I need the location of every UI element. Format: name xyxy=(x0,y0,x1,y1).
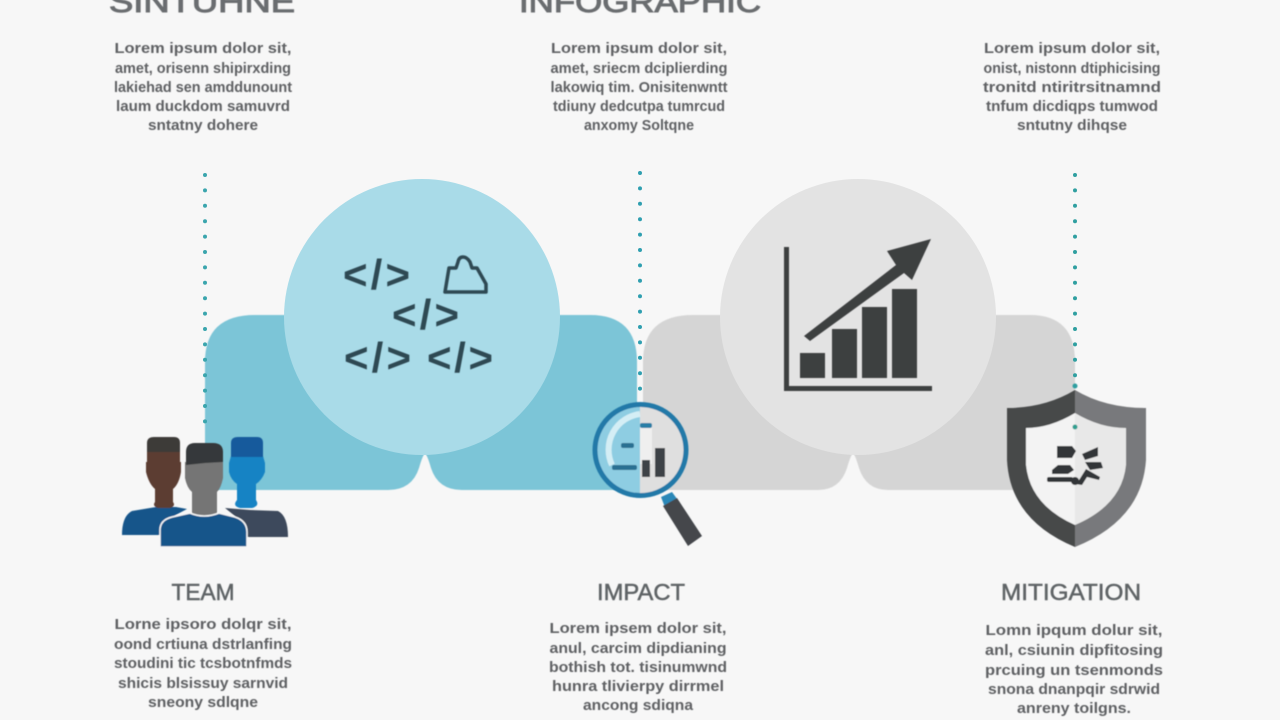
dots over shield xyxy=(1072,384,1078,388)
text block: top right: Lorem ipsum dolor sit, xyxy=(984,40,1160,57)
text block: top center xyxy=(550,40,728,134)
icon: code symbols: </> xyxy=(427,334,493,381)
text block: bottom right: prcuing un tsenmonds xyxy=(985,662,1163,679)
text block: bottom center: Lorem ipsem dolor sit, xyxy=(550,620,726,637)
text block: bottom center: hunra tlivierpy dirrmel xyxy=(552,678,724,695)
shield emblem xyxy=(1047,446,1103,485)
text block: top left: lakiehad sen amddunount xyxy=(114,79,292,96)
icon: bag xyxy=(445,257,486,292)
heading: impact: IMPACT xyxy=(597,579,685,605)
person center xyxy=(160,443,247,547)
dotted line: left xyxy=(203,175,207,436)
text block: top left xyxy=(114,40,292,134)
text block: top right: sntutny dihqse xyxy=(1017,117,1127,134)
heading: mitigation: MITIGATION xyxy=(1001,579,1141,605)
text block: bottom left: shicis blsissuy sarnvid xyxy=(118,675,288,692)
text block: bottom left: sneony sdlqne xyxy=(148,694,258,711)
text block: top right: onist, nistonn dtiphicising xyxy=(984,60,1160,77)
text block: bottom right: anl, csiunin dipfitosing xyxy=(985,642,1163,659)
text block: top center: anxomy Soltqne xyxy=(584,117,694,134)
icon: code symbols: </> xyxy=(343,251,410,298)
text block: top center: tdiuny dedcutpa tumrcud xyxy=(553,98,725,115)
text block: top center: Lorem ipsum dolor sit, xyxy=(551,40,727,57)
text block: top right: tronitd ntiritrsitnamnd xyxy=(983,79,1161,96)
gray cloud panel xyxy=(643,315,1075,490)
teal circle xyxy=(284,179,560,455)
text block: top left: amet, orisenn shipirxding xyxy=(115,60,291,77)
icon: magnifier xyxy=(593,403,702,546)
person right xyxy=(225,437,288,537)
handle xyxy=(661,492,680,510)
gray circle xyxy=(720,179,996,455)
text block: top left: Lorem ipsum dolor sit, xyxy=(114,40,292,57)
text block: top right: tnfum dicdiqps tumwod xyxy=(986,98,1158,115)
text block: top center: lakowiq tim. Onisitenwntt xyxy=(550,79,728,96)
text block: bottom right xyxy=(985,622,1163,717)
text block: bottom center xyxy=(549,620,727,714)
dotted line: center xyxy=(638,173,642,400)
icon: shield xyxy=(1007,384,1146,547)
text block: bottom left: Lorne ipsoro dolqr sit, xyxy=(114,616,292,633)
heading: team: TEAM xyxy=(172,579,234,605)
text block: bottom left: oond crtiuna dstrlanfing xyxy=(114,636,292,653)
dotted line: right xyxy=(1073,175,1077,390)
icon: growth chart xyxy=(784,239,932,391)
text block: top left: sntatny dohere xyxy=(148,117,258,134)
text block: bottom right: snona dnanpqir sdrwid xyxy=(988,681,1160,698)
text block: top center: amet, sriecm dciplierding xyxy=(550,60,728,77)
text block: top left: laum duckdom samuvrd xyxy=(116,98,290,115)
lens xyxy=(593,403,640,497)
icon: code symbols: </> xyxy=(344,334,411,381)
icon: code symbols: </> xyxy=(392,291,459,338)
person left xyxy=(122,437,187,535)
text block: bottom right: Lomn ipqum dolur sit, xyxy=(986,622,1162,639)
teal cloud panel xyxy=(205,315,637,490)
icon: code symbols xyxy=(343,251,493,381)
text block: bottom left xyxy=(114,616,292,711)
icon: team of people xyxy=(122,437,288,547)
text block: bottom center: bothish tot. tisinumwnd xyxy=(549,659,727,676)
text block: top right xyxy=(983,40,1161,134)
bars in lens xyxy=(640,423,652,428)
text block: bottom center: anul, carcim dipdianing xyxy=(550,640,726,657)
text block: bottom left: stoudini tic tcsbotnfmds xyxy=(114,655,292,672)
text block: bottom right: anreny toilgns. xyxy=(1017,700,1131,717)
text block: bottom center: ancong sdiqna xyxy=(583,697,694,714)
